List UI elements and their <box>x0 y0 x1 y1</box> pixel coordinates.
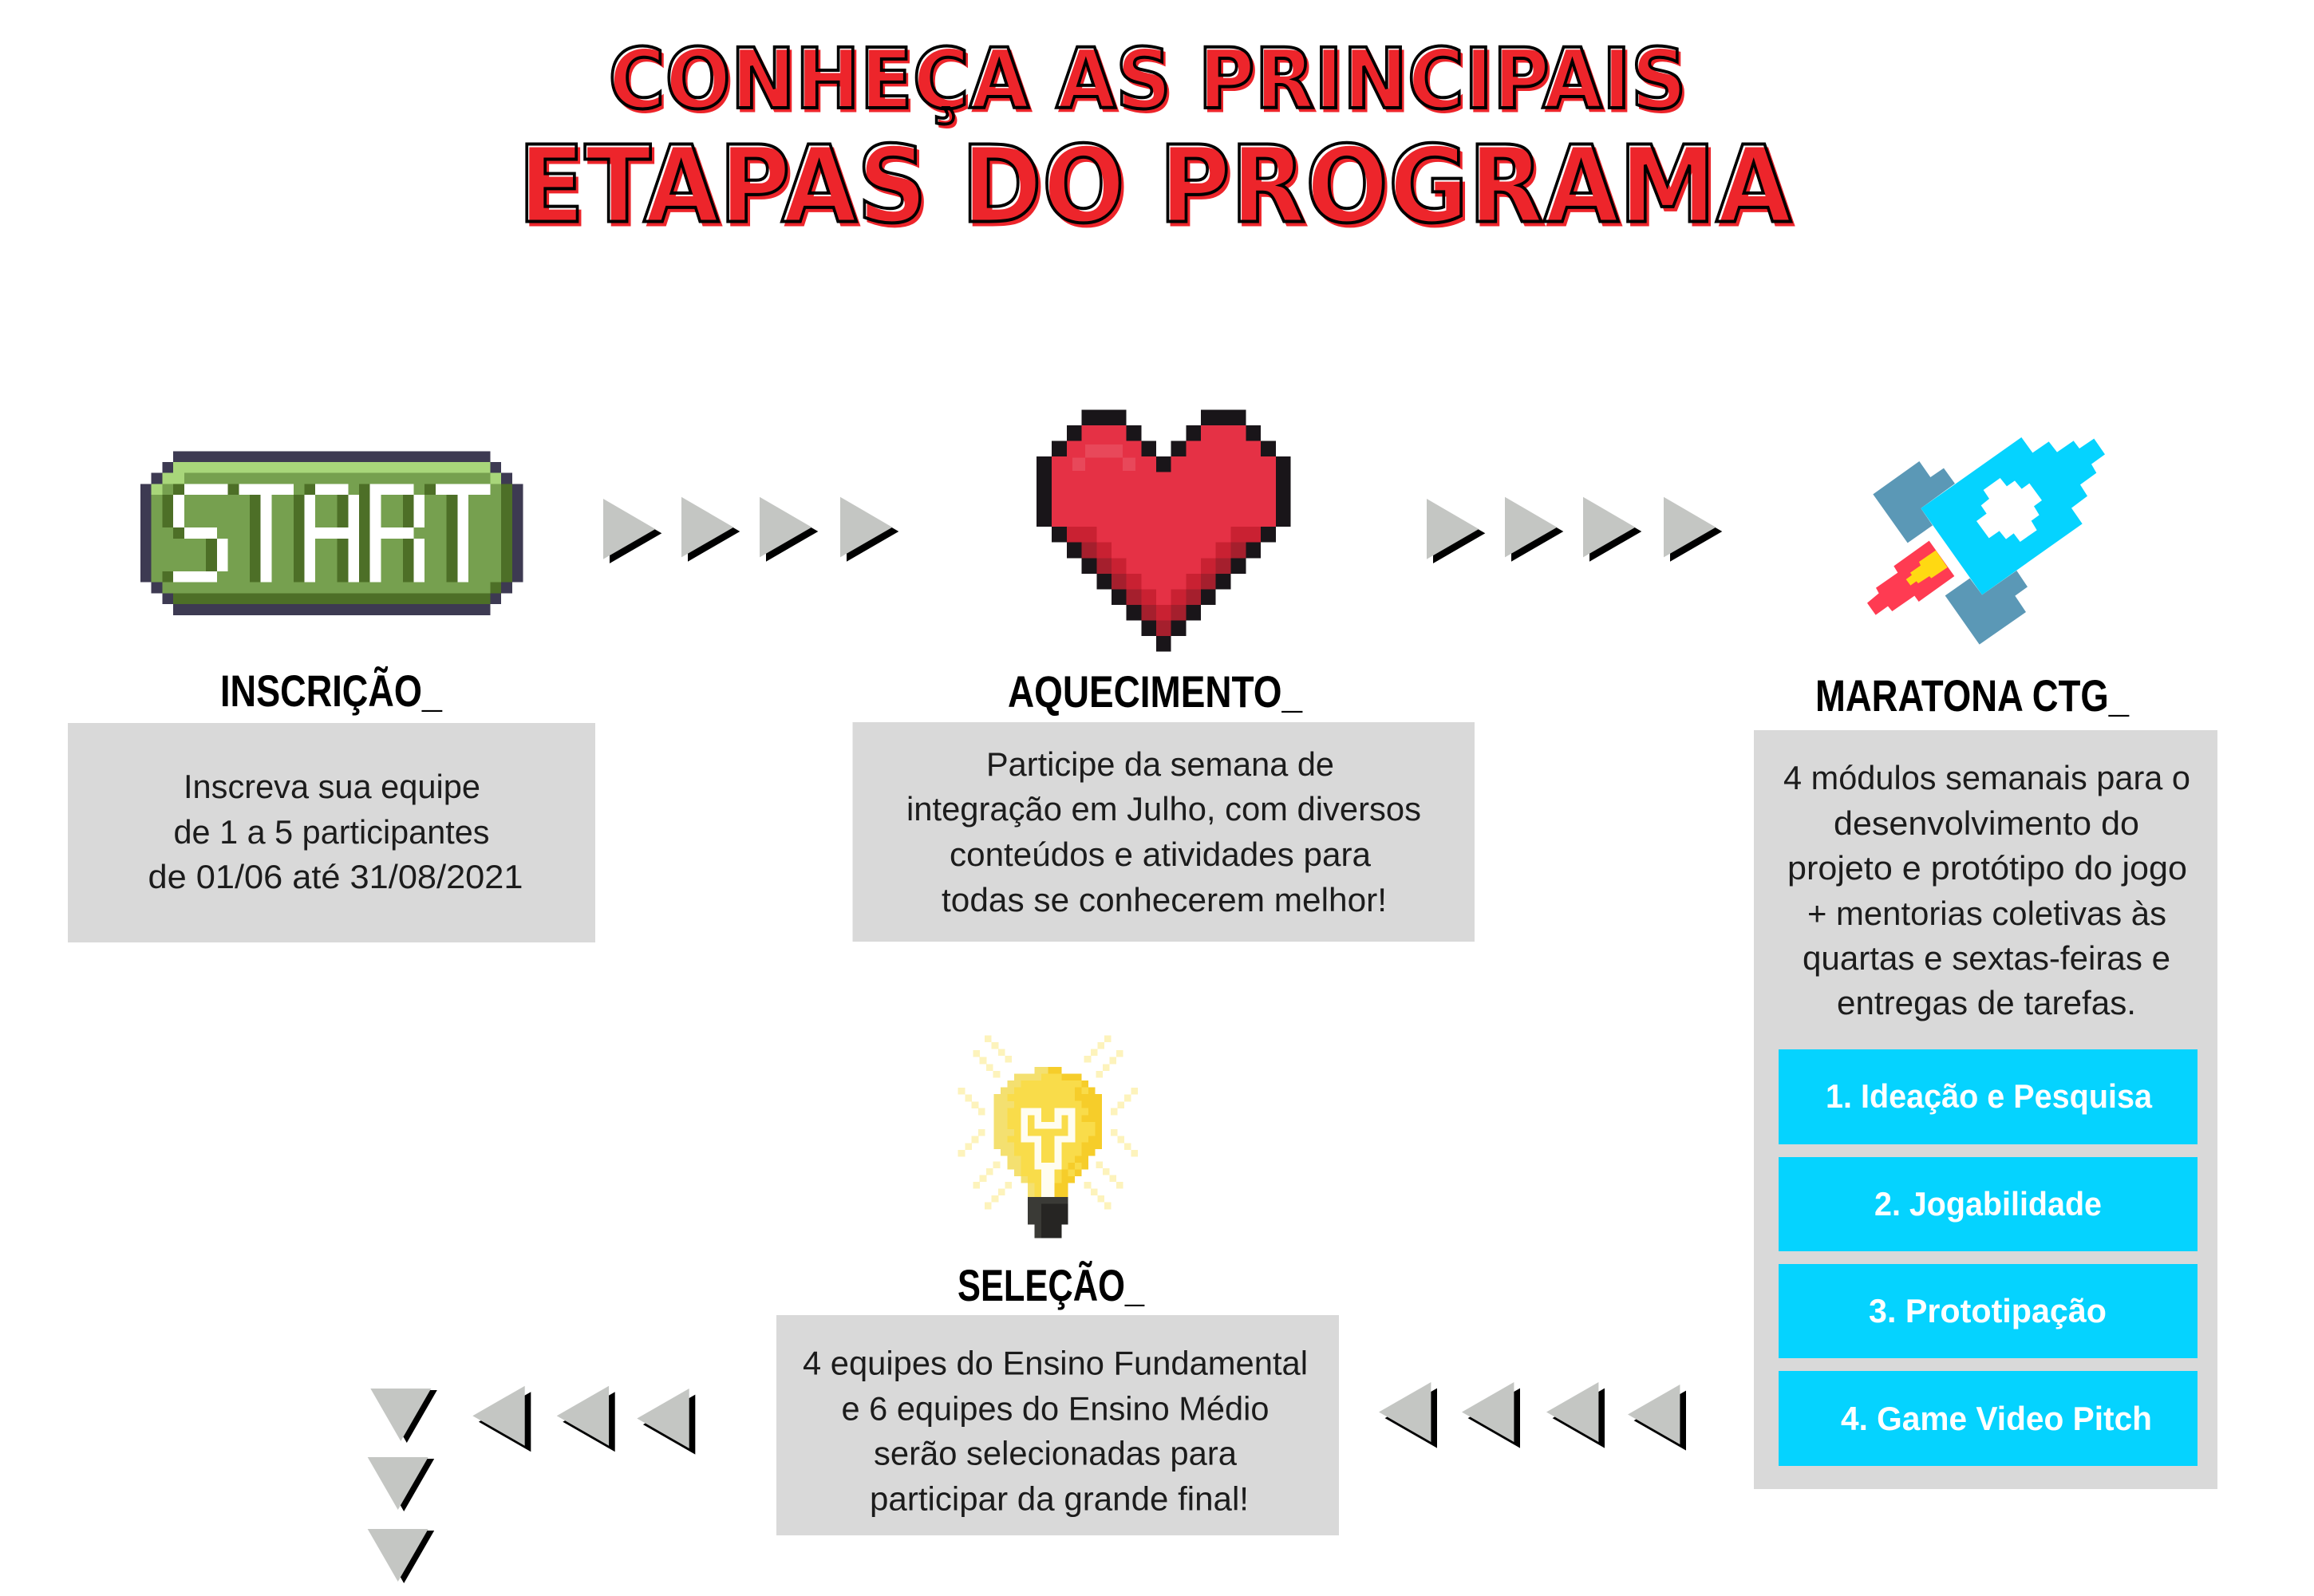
title: ETAPAS DO PROGRAMA <box>518 124 1791 247</box>
arrow 2 <box>368 1457 434 1511</box>
module 2: 2. Jogabilidade <box>1874 1185 2102 1223</box>
panel text: todas se conhecerem melhor! <box>942 881 1387 918</box>
panel: seleção <box>776 1260 1339 1535</box>
panel text <box>148 768 523 895</box>
panel text: desenvolvimento do <box>1834 804 2139 842</box>
icon: pixel light bulb <box>958 1035 1138 1238</box>
arrow 1 <box>370 1389 437 1443</box>
arrow 4 <box>1628 1385 1686 1451</box>
panel background <box>852 722 1475 942</box>
arrow 3 <box>1546 1382 1605 1448</box>
arrow 3 <box>760 497 818 562</box>
panel text: integração em Julho, com diversos <box>906 790 1421 828</box>
panel text: + mentorias coletivas às <box>1807 895 2166 932</box>
arrow 1 <box>1379 1382 1437 1448</box>
arrow 3 <box>637 1389 695 1455</box>
arrows: rocket panel to seleção <box>1379 1382 1686 1451</box>
panel: aquecimento <box>852 666 1475 942</box>
module 2 <box>1779 1157 2198 1251</box>
panel text: 4 módulos semanais para o <box>1783 759 2190 796</box>
arrow 1 <box>1427 499 1485 563</box>
panel text: Inscreva sua equipe <box>184 768 480 805</box>
icon: pixel heart <box>1037 410 1291 651</box>
panel text: quartas e sextas-feiras e <box>1803 939 2170 977</box>
module 1 <box>1779 1049 2198 1144</box>
title: CONHEÇA AS PRINCIPAIS <box>608 30 1687 128</box>
heading: seleção: SELEÇÃO_ <box>958 1260 1145 1310</box>
panel text <box>906 745 1421 918</box>
arrow 2 <box>1462 1382 1520 1448</box>
panel background <box>1754 730 2217 1489</box>
panel text: de 1 a 5 participantes <box>174 813 490 851</box>
panel text: projeto e protótipo do jogo <box>1787 849 2187 887</box>
panel text: conteúdos e atividades para <box>950 836 1372 873</box>
icon: pixel rocket <box>1867 437 2105 645</box>
panel text <box>1783 759 2190 1021</box>
title: CONHEÇA AS PRINCIPAIS <box>611 34 1689 131</box>
panel text: 4 equipes do Ensino Fundamental <box>803 1344 1308 1382</box>
panel text <box>803 1344 1308 1518</box>
arrow 2 <box>681 497 740 562</box>
arrows: start to heart <box>603 497 898 563</box>
heading: inscrição: INSCRIÇÃO_ <box>220 666 443 716</box>
module 4: 4. Game Video Pitch <box>1841 1400 2152 1437</box>
heading: aquecimento: AQUECIMENTO_ <box>1008 666 1303 717</box>
panel text: e 6 equipes do Ensino Médio <box>841 1390 1269 1427</box>
panel: maratona ctg <box>1754 670 2217 1489</box>
title <box>518 30 1795 251</box>
arrow 4 <box>840 497 898 562</box>
panel background <box>68 723 595 942</box>
panel text: serão selecionadas para <box>874 1435 1238 1472</box>
panel text: Participe da semana de <box>986 745 1334 783</box>
arrow 1 <box>603 499 661 563</box>
heading: maratona ctg: MARATONA CTG_ <box>1815 670 2130 721</box>
arrow 1 <box>472 1386 531 1452</box>
arrow 3 <box>368 1529 434 1583</box>
module 3 <box>1779 1264 2198 1358</box>
panel background <box>776 1315 1339 1535</box>
panel text: participar da grande final! <box>870 1479 1249 1518</box>
title: ETAPAS DO PROGRAMA <box>521 128 1795 251</box>
arrow 3 <box>1583 497 1641 562</box>
arrow 2 <box>1505 497 1563 562</box>
arrows: heart to rocket <box>1427 497 1722 563</box>
panel: inscrição <box>68 666 595 942</box>
module 1: 1. Ideação e Pesquisa <box>1826 1077 2153 1115</box>
arrows: downward <box>368 1389 437 1583</box>
icon: pixel START button <box>140 451 523 615</box>
module 3: 3. Prototipação <box>1869 1292 2107 1329</box>
arrow 4 <box>1664 497 1722 562</box>
module 4 <box>1779 1371 2198 1466</box>
arrow 2 <box>557 1386 615 1452</box>
panel text: entregas de tarefas. <box>1837 984 2136 1021</box>
arrows: seleção leftwards <box>472 1386 695 1455</box>
panel text: de 01/06 até 31/08/2021 <box>148 858 523 895</box>
